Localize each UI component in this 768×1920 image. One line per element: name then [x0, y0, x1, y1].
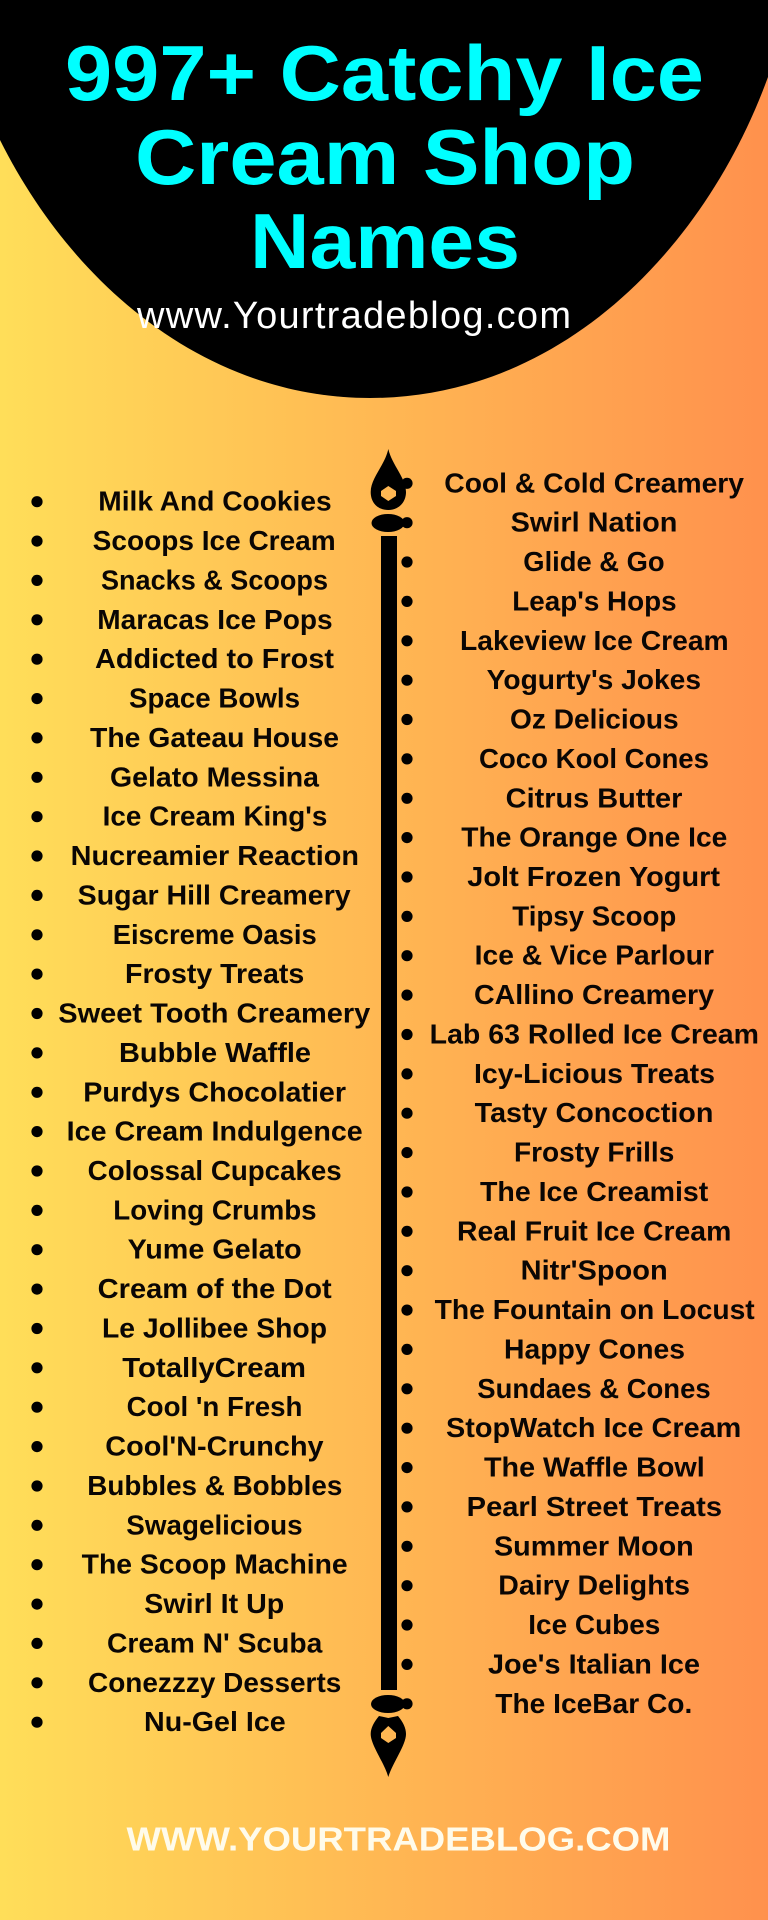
list item: Ice & Vice Parlour	[475, 940, 714, 971]
list item: Bubbles & Bobbles	[87, 1470, 342, 1501]
list item: Cream of the Dot	[98, 1273, 332, 1304]
list item: The Scoop Machine	[82, 1549, 348, 1580]
list item: Frosty Treats	[125, 958, 304, 989]
list item	[31, 683, 300, 714]
list item: Happy Cones	[504, 1333, 685, 1364]
list item: Eiscreme Oasis	[113, 919, 317, 950]
list item: TotallyCream	[122, 1352, 306, 1383]
list item: The Orange One Ice	[461, 822, 727, 853]
list item: Icy-Licious Treats	[474, 1058, 715, 1089]
list item: Coco Kool Cones	[479, 743, 709, 774]
title	[65, 29, 704, 285]
list item	[31, 761, 320, 792]
list item: Sundaes & Cones	[477, 1373, 711, 1404]
list item: Tasty Concoction	[475, 1097, 713, 1128]
list item	[31, 1391, 302, 1422]
list item: Real Fruit Ice Cream	[457, 1215, 731, 1246]
list item: Lakeview Ice Cream	[460, 625, 729, 656]
list item: Pearl Street Treats	[467, 1491, 722, 1522]
list item: Ice Cubes	[528, 1609, 660, 1640]
list item: Bubble Waffle	[119, 1037, 311, 1068]
list item	[31, 1706, 286, 1737]
list item: Citrus Butter	[506, 782, 683, 813]
bottom collar	[371, 1695, 405, 1713]
list item: Sweet Tooth Creamery	[58, 998, 371, 1028]
list item	[401, 1255, 668, 1286]
list item: Snacks & Scoops	[101, 564, 328, 595]
list item	[31, 1509, 303, 1540]
title: 997+ Catchy Ice	[65, 29, 704, 117]
list item: Milk And Cookies	[98, 486, 332, 517]
list item: Jolt Frozen Yogurt	[467, 861, 720, 892]
list item: Maracas Ice Pops	[97, 604, 333, 635]
list item: Yume Gelato	[128, 1234, 302, 1265]
list item	[401, 1609, 660, 1640]
list item: Nitr'Spoon	[521, 1255, 668, 1286]
list item: The Fountain on Locust	[435, 1294, 755, 1325]
list item: The Gateau House	[90, 722, 339, 753]
footer website url: WWW.YOURTRADEBLOG.COM	[126, 1821, 670, 1858]
list item: Space Bowls	[129, 683, 300, 714]
list item: Lab 63 Rolled Ice Cream	[430, 1018, 759, 1050]
list item	[401, 1688, 692, 1719]
list item: Ice Cream King's	[103, 801, 327, 832]
list item: Loving Crumbs	[113, 1194, 317, 1225]
list item: StopWatch Ice Cream	[446, 1412, 741, 1443]
list item: The IceBar Co.	[495, 1688, 692, 1719]
list item: Tipsy Scoop	[512, 900, 676, 931]
list item: Oz Delicious	[510, 704, 679, 734]
list item	[401, 507, 677, 538]
list item: Yogurty's Jokes	[487, 664, 701, 695]
top collar	[372, 514, 404, 532]
list item: Sugar Hill Creamery	[78, 879, 351, 910]
list item	[31, 958, 304, 989]
list item	[401, 1137, 674, 1168]
list item: The Waffle Bowl	[484, 1452, 705, 1483]
list item	[31, 1352, 306, 1383]
list item	[401, 1452, 705, 1483]
bottom spear head	[371, 1716, 406, 1777]
list item: Purdys Chocolatier	[83, 1076, 346, 1107]
list item	[401, 664, 701, 695]
list item: Glide & Go	[523, 546, 665, 577]
list item	[401, 704, 679, 734]
list item: Gelato Messina	[110, 761, 320, 792]
list item: Cool 'n Fresh	[127, 1391, 302, 1422]
list item: Joe's Italian Ice	[488, 1648, 700, 1679]
list item	[31, 1234, 302, 1265]
list item: Ice Cream Indulgence	[67, 1116, 363, 1147]
list item: Leap's Hops	[512, 585, 677, 616]
list item: Cool & Cold Creamery	[444, 467, 745, 498]
divider: ornamental spear	[371, 449, 406, 1777]
list item	[401, 900, 676, 931]
list item	[401, 1648, 700, 1679]
list item	[401, 782, 683, 813]
list item	[401, 1570, 690, 1601]
list item: Swagelicious	[126, 1509, 303, 1540]
list item: Nucreamier Reaction	[71, 840, 359, 871]
list item: Swirl Nation	[511, 507, 677, 538]
list item	[401, 585, 677, 616]
list item: Frosty Frills	[514, 1137, 674, 1168]
list item: Swirl It Up	[144, 1588, 284, 1619]
list item	[401, 1333, 685, 1364]
header website url: www.Yourtradeblog.com	[136, 295, 571, 337]
spear shaft	[381, 536, 397, 1690]
list item: Nu-Gel Ice	[144, 1706, 286, 1737]
list item	[401, 546, 665, 577]
list item: Cream N' Scuba	[107, 1627, 323, 1658]
list item: The Ice Creamist	[480, 1176, 708, 1207]
title: Cream Shop	[135, 113, 635, 201]
panel: right list of names	[401, 467, 759, 1719]
list item: Addicted to Frost	[95, 643, 334, 674]
list item	[401, 1530, 694, 1561]
list item: Dairy Delights	[498, 1570, 690, 1601]
list item: Scoops Ice Cream	[93, 525, 336, 556]
list item: Le Jollibee Shop	[102, 1312, 327, 1344]
title: Names	[250, 197, 520, 285]
list item	[31, 1588, 284, 1619]
list item: Conezzzy Desserts	[88, 1667, 341, 1698]
top spear head	[371, 449, 406, 510]
list item	[31, 1037, 311, 1068]
list item: Summer Moon	[494, 1530, 694, 1561]
list item: Colossal Cupcakes	[88, 1155, 342, 1186]
black header shape	[0, 0, 768, 398]
list item: CAllino Creamery	[474, 979, 715, 1010]
list item: Cool'N-Crunchy	[105, 1431, 324, 1462]
panel: left list of names	[31, 486, 371, 1737]
